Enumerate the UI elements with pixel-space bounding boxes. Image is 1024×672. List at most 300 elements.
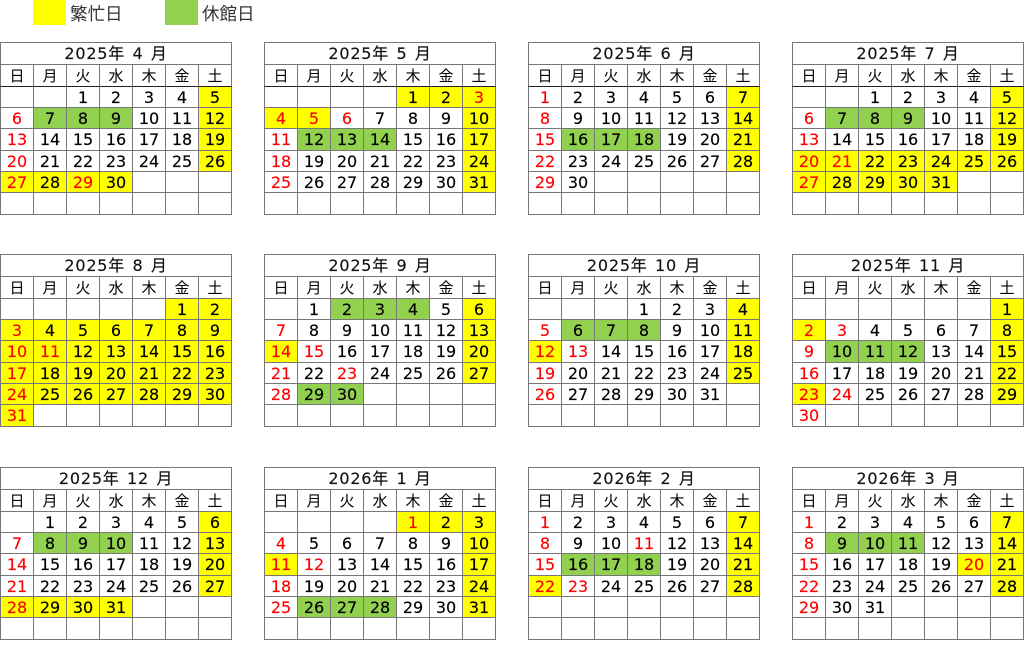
date grid: 6 — [936, 321, 946, 340]
date grid: 16 — [106, 130, 126, 149]
weekday header — [792, 65, 1024, 87]
date grid: 19 — [997, 130, 1017, 149]
date grid: 10 — [7, 342, 27, 361]
weekday header: 木 — [405, 277, 420, 298]
date grid: 2 — [78, 512, 88, 532]
date grid: 10 — [601, 109, 621, 128]
date grid: 22 — [304, 364, 324, 383]
date grid — [529, 87, 760, 215]
date grid: 31 — [469, 173, 489, 192]
date grid: 18 — [964, 130, 984, 149]
weekday header: 土 — [207, 65, 222, 86]
date grid: 7 — [375, 109, 385, 128]
date grid: 5 — [78, 321, 88, 340]
date grid: 1 — [45, 512, 55, 532]
date grid: 24 — [601, 577, 621, 596]
date grid — [793, 87, 1024, 215]
date grid: 31 — [7, 406, 27, 425]
date grid: 23 — [106, 152, 126, 171]
date grid: 5 — [309, 534, 319, 553]
date grid: 13 — [964, 534, 984, 553]
date grid: 22 — [997, 364, 1017, 383]
date grid: 7 — [738, 512, 748, 532]
date grid: 6 — [804, 109, 814, 128]
date grid: 12 — [304, 130, 324, 149]
panel: June 2025 — [528, 42, 760, 215]
date grid: 3 — [144, 88, 154, 106]
date grid — [265, 299, 496, 427]
date grid: 3 — [870, 512, 880, 532]
date grid: 15 — [73, 130, 93, 149]
weekday header: 土 — [999, 277, 1014, 298]
month heading: 2025年 5 月 — [328, 44, 432, 63]
date grid: 24 — [106, 577, 126, 596]
date grid: 9 — [903, 109, 913, 128]
date grid: 7 — [144, 321, 154, 340]
date grid: 6 — [474, 300, 484, 318]
date grid: 4 — [276, 109, 286, 128]
weekday header: 水 — [372, 277, 388, 298]
date grid: 14 — [832, 130, 852, 149]
date grid: 18 — [40, 364, 60, 383]
date grid: 27 — [799, 173, 819, 192]
date grid: 10 — [931, 109, 951, 128]
weekday header: 土 — [471, 277, 486, 298]
date grid: 3 — [705, 300, 715, 318]
weekday header: 日 — [9, 277, 24, 298]
date grid: 2 — [342, 300, 352, 318]
date grid: 4 — [903, 512, 913, 532]
date grid — [265, 87, 496, 215]
panel: November 2025 — [792, 254, 1024, 427]
date grid: 15 — [865, 130, 885, 149]
date grid: 24 — [469, 152, 489, 171]
date grid: 10 — [700, 321, 720, 340]
date grid: 5 — [1002, 88, 1012, 106]
date grid: 13 — [337, 130, 357, 149]
date grid: 8 — [1002, 321, 1012, 340]
weekday header: 月 — [42, 65, 58, 86]
date grid: 4 — [177, 88, 187, 106]
weekday header: 木 — [405, 65, 420, 86]
weekday header: 木 — [933, 65, 948, 86]
date grid: 20 — [799, 152, 819, 171]
date grid: 3 — [474, 88, 484, 106]
weekday header: 日 — [273, 490, 288, 511]
date grid: 10 — [139, 109, 159, 128]
date grid: 4 — [639, 88, 649, 106]
month heading — [793, 468, 1024, 490]
weekday header: 日 — [801, 277, 816, 298]
date grid: 18 — [865, 364, 885, 383]
date grid: 1 — [408, 88, 418, 106]
date grid: 23 — [898, 152, 918, 171]
date grid: 20 — [700, 130, 720, 149]
weekday header — [264, 65, 496, 87]
date grid: 27 — [700, 152, 720, 171]
date grid: 25 — [634, 577, 654, 596]
date grid: 8 — [177, 321, 187, 340]
date grid: 28 — [370, 173, 390, 192]
weekday header — [0, 65, 232, 87]
date grid: 22 — [403, 152, 423, 171]
weekday header: 水 — [372, 490, 388, 511]
date grid: 22 — [634, 364, 654, 383]
date grid: 14 — [370, 555, 390, 574]
date grid: 31 — [931, 173, 951, 192]
date grid: 31 — [700, 385, 720, 404]
date grid: 19 — [304, 577, 324, 596]
date grid: 19 — [73, 364, 93, 383]
weekday header: 土 — [999, 490, 1014, 511]
date grid: 18 — [898, 555, 918, 574]
date grid: 12 — [436, 321, 456, 340]
date grid: 25 — [865, 385, 885, 404]
date grid: 2 — [804, 321, 814, 340]
date grid: 28 — [733, 577, 753, 596]
date grid: 19 — [205, 130, 225, 149]
date grid: 25 — [964, 152, 984, 171]
date grid: 22 — [535, 152, 555, 171]
weekday header: 水 — [108, 277, 124, 298]
date grid: 17 — [931, 130, 951, 149]
date grid: 13 — [106, 342, 126, 361]
weekday header: 水 — [108, 65, 124, 86]
date grid: 26 — [436, 364, 456, 383]
date grid: 27 — [337, 173, 357, 192]
date grid: 28 — [997, 577, 1017, 596]
date grid: 30 — [568, 173, 588, 192]
date grid: 19 — [931, 555, 951, 574]
date grid: 11 — [271, 130, 291, 149]
date grid: 20 — [337, 577, 357, 596]
date grid: 2 — [903, 88, 913, 106]
date grid: 6 — [342, 534, 352, 553]
date grid: 29 — [172, 385, 192, 404]
date grid: 1 — [804, 512, 814, 532]
date grid: 20 — [964, 555, 984, 574]
date grid: 21 — [370, 577, 390, 596]
date grid: 22 — [73, 152, 93, 171]
date grid: 23 — [832, 577, 852, 596]
date grid: 8 — [309, 321, 319, 340]
weekday header: 火 — [75, 65, 90, 86]
date grid: 23 — [799, 385, 819, 404]
date grid: 15 — [535, 130, 555, 149]
date grid: 7 — [45, 109, 55, 128]
date grid: 9 — [342, 321, 352, 340]
date grid: 18 — [139, 555, 159, 574]
month heading — [1, 43, 232, 65]
date grid: 29 — [865, 173, 885, 192]
weekday header — [529, 277, 760, 299]
date grid: 21 — [271, 364, 291, 383]
date grid: 2 — [573, 512, 583, 532]
weekday header: 月 — [306, 65, 322, 86]
date grid: 14 — [139, 342, 159, 361]
date grid: 11 — [271, 555, 291, 574]
date grid: 1 — [1002, 300, 1012, 318]
date grid: 14 — [997, 534, 1017, 553]
date grid: 21 — [997, 555, 1017, 574]
date grid: 5 — [936, 512, 946, 532]
date grid: 18 — [634, 555, 654, 574]
date grid: 11 — [865, 342, 885, 361]
date grid: 23 — [568, 577, 588, 596]
date grid: 17 — [832, 364, 852, 383]
month heading — [1, 468, 232, 490]
weekday header: 木 — [933, 277, 948, 298]
month heading — [793, 43, 1024, 65]
date grid: 29 — [304, 385, 324, 404]
date grid: 17 — [601, 130, 621, 149]
date grid: 4 — [45, 321, 55, 340]
month heading — [265, 255, 496, 277]
date grid: 28 — [733, 152, 753, 171]
weekday header — [1, 490, 232, 512]
date grid: 23 — [205, 364, 225, 383]
date grid: 9 — [210, 321, 220, 340]
date grid: 22 — [865, 152, 885, 171]
date grid: 8 — [804, 534, 814, 553]
date grid: 23 — [73, 577, 93, 596]
weekday header: 日 — [801, 65, 816, 86]
date grid: 7 — [837, 109, 847, 128]
date grid: 24 — [370, 364, 390, 383]
date grid: 8 — [870, 109, 880, 128]
date grid: 14 — [733, 109, 753, 128]
weekday header: 火 — [75, 277, 90, 298]
date grid: 27 — [205, 577, 225, 596]
date grid: 30 — [106, 173, 126, 192]
date grid: 24 — [469, 577, 489, 596]
weekday header: 金 — [438, 65, 454, 86]
date grid: 1 — [540, 88, 550, 106]
weekday header: 日 — [9, 490, 24, 511]
weekday header: 月 — [306, 490, 322, 511]
weekday header: 日 — [273, 277, 288, 298]
date grid: 9 — [573, 534, 583, 553]
date grid — [793, 512, 1024, 640]
date grid: 30 — [436, 173, 456, 192]
month heading: 2025年 11 月 — [851, 256, 965, 275]
date grid: 5 — [672, 512, 682, 532]
date grid: 15 — [40, 555, 60, 574]
date grid: 10 — [469, 534, 489, 553]
date grid: 15 — [799, 555, 819, 574]
date grid: 14 — [40, 130, 60, 149]
date grid: 27 — [337, 598, 357, 617]
weekday header: 木 — [141, 277, 156, 298]
weekday header: 木 — [933, 490, 948, 511]
date grid: 11 — [634, 534, 654, 553]
date grid: 4 — [276, 534, 286, 553]
date grid: 6 — [12, 109, 22, 128]
legend swatch: busy day — [33, 0, 66, 25]
weekday header: 木 — [669, 277, 684, 298]
date grid: 17 — [139, 130, 159, 149]
weekday header: 日 — [537, 65, 552, 86]
panel: September 2025 — [264, 254, 496, 427]
date grid: 10 — [469, 109, 489, 128]
date grid: 4 — [144, 512, 154, 532]
month heading: 2025年 4 月 — [64, 44, 168, 63]
date grid: 12 — [931, 534, 951, 553]
weekday header: 月 — [570, 277, 586, 298]
date grid: 8 — [78, 109, 88, 128]
panel: December 2025 — [0, 467, 232, 640]
date grid: 11 — [40, 342, 60, 361]
date grid: 3 — [111, 512, 121, 532]
weekday header: 土 — [999, 65, 1014, 86]
date grid: 18 — [172, 130, 192, 149]
weekday header: 月 — [42, 277, 58, 298]
date grid: 13 — [700, 109, 720, 128]
weekday header: 金 — [702, 65, 718, 86]
date grid: 27 — [568, 385, 588, 404]
date grid: 31 — [469, 598, 489, 617]
month heading: 2026年 3 月 — [856, 469, 960, 488]
date grid: 28 — [271, 385, 291, 404]
date grid: 17 — [106, 555, 126, 574]
date grid: 11 — [139, 534, 159, 553]
date grid: 16 — [568, 555, 588, 574]
weekday header: 土 — [207, 490, 222, 511]
date grid: 29 — [73, 173, 93, 192]
date grid: 3 — [606, 512, 616, 532]
weekday header: 月 — [570, 65, 586, 86]
date grid: 6 — [210, 512, 220, 532]
date grid: 16 — [568, 130, 588, 149]
date grid: 14 — [601, 342, 621, 361]
date grid: 19 — [535, 364, 555, 383]
weekday header: 月 — [306, 277, 322, 298]
legend swatch: closed day — [165, 0, 198, 25]
date grid: 3 — [12, 321, 22, 340]
weekday header: 月 — [834, 277, 850, 298]
date grid: 6 — [573, 321, 583, 340]
month heading: 2025年 12 月 — [59, 469, 173, 488]
date grid: 29 — [403, 173, 423, 192]
date grid — [1, 512, 232, 640]
weekday header: 火 — [75, 490, 90, 511]
weekday header: 土 — [735, 490, 750, 511]
weekday header: 水 — [636, 65, 652, 86]
weekday header: 土 — [471, 490, 486, 511]
date grid: 26 — [931, 577, 951, 596]
panel: October 2025 — [528, 254, 760, 427]
date grid: 25 — [271, 173, 291, 192]
date grid: 9 — [78, 534, 88, 553]
date grid: 23 — [568, 152, 588, 171]
date grid: 16 — [799, 364, 819, 383]
weekday header: 金 — [966, 277, 982, 298]
date grid: 11 — [403, 321, 423, 340]
date grid: 20 — [931, 364, 951, 383]
month heading: 2025年 10 月 — [587, 256, 701, 275]
date grid: 30 — [832, 598, 852, 617]
date grid: 27 — [7, 173, 27, 192]
date grid: 15 — [403, 130, 423, 149]
weekday header: 火 — [867, 65, 882, 86]
date grid: 2 — [837, 512, 847, 532]
date grid: 10 — [106, 534, 126, 553]
date grid: 11 — [964, 109, 984, 128]
date grid: 16 — [73, 555, 93, 574]
date grid: 12 — [172, 534, 192, 553]
month heading: 2026年 2 月 — [592, 469, 696, 488]
date grid: 3 — [837, 321, 847, 340]
date grid: 3 — [375, 300, 385, 318]
date grid: 7 — [276, 321, 286, 340]
date grid: 15 — [997, 342, 1017, 361]
date grid: 7 — [969, 321, 979, 340]
date grid: 5 — [903, 321, 913, 340]
date grid: 29 — [634, 385, 654, 404]
weekday header: 土 — [735, 277, 750, 298]
date grid: 10 — [601, 534, 621, 553]
date grid: 28 — [964, 385, 984, 404]
date grid: 1 — [177, 300, 187, 318]
weekday header: 水 — [900, 490, 916, 511]
date grid: 19 — [172, 555, 192, 574]
date grid: 25 — [733, 364, 753, 383]
date grid: 21 — [370, 152, 390, 171]
date grid: 15 — [172, 342, 192, 361]
date grid: 14 — [964, 342, 984, 361]
date grid: 24 — [7, 385, 27, 404]
panel: March 2026 — [792, 467, 1024, 640]
weekday header: 火 — [603, 490, 618, 511]
date grid: 21 — [733, 555, 753, 574]
date grid: 9 — [441, 109, 451, 128]
date grid: 13 — [205, 534, 225, 553]
date grid: 15 — [304, 342, 324, 361]
weekday header — [265, 277, 496, 299]
date grid: 3 — [474, 512, 484, 532]
date grid: 26 — [205, 152, 225, 171]
weekday header — [529, 490, 760, 512]
date grid: 29 — [40, 598, 60, 617]
weekday header: 火 — [339, 490, 354, 511]
weekday header: 火 — [339, 277, 354, 298]
month heading — [1, 255, 232, 277]
date grid: 3 — [936, 88, 946, 106]
date grid: 14 — [7, 555, 27, 574]
date grid: 13 — [931, 342, 951, 361]
weekday header: 水 — [372, 65, 388, 86]
legend label: busy day: 繁忙日 — [70, 1, 122, 26]
date grid: 21 — [139, 364, 159, 383]
date grid: 17 — [7, 364, 27, 383]
date grid: 29 — [799, 598, 819, 617]
date grid: 28 — [40, 173, 60, 192]
date grid: 13 — [700, 534, 720, 553]
date grid: 24 — [931, 152, 951, 171]
date grid: 12 — [205, 109, 225, 128]
date grid: 27 — [106, 385, 126, 404]
weekday header: 金 — [702, 490, 718, 511]
date grid: 13 — [568, 342, 588, 361]
month heading: 2025年 6 月 — [592, 44, 696, 63]
date grid: 18 — [733, 342, 753, 361]
date grid: 7 — [738, 88, 748, 106]
date grid — [265, 512, 496, 640]
date grid: 21 — [964, 364, 984, 383]
weekday header: 木 — [141, 490, 156, 511]
month heading — [529, 43, 760, 65]
date grid: 28 — [601, 385, 621, 404]
